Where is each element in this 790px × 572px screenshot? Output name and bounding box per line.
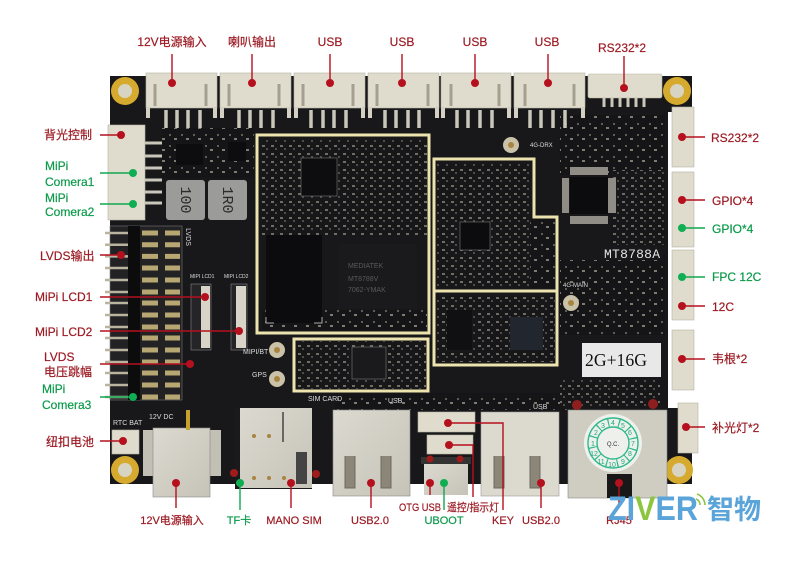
left labels: LVDS (44, 350, 74, 364)
LVDS pin header (105, 226, 191, 400)
top connectors (146, 73, 585, 128)
left labels: 纽扣电池 (46, 435, 94, 449)
left labels: MiPi LCD1 (35, 290, 93, 304)
RF antenna connectors: 4G-DRX (530, 143, 553, 149)
bottom labels: OTG USB (399, 502, 441, 514)
top labels (137, 34, 646, 55)
DC jack (143, 410, 221, 497)
RJ45 jack: 10 (608, 462, 616, 469)
bottom labels (140, 500, 632, 527)
bottom labels: USB2.0 (522, 515, 560, 527)
inductors: 1R0 (218, 186, 235, 214)
RJ45 jack: 6 (628, 430, 632, 437)
board silk: RTC BAT, 12V DC, SIM CARD: USB (388, 398, 403, 405)
bottom labels: UBOOT (424, 515, 464, 527)
RJ45 jack: 12 (590, 451, 598, 458)
connector: RS232 top (588, 74, 662, 107)
right labels: 韦根*2 (712, 352, 748, 366)
RTC battery connector (112, 430, 139, 454)
mounting hole: top right (663, 77, 691, 105)
RJ45 jack (568, 399, 667, 498)
left labels: LVDS输出 (40, 248, 94, 263)
board silk: RTC BAT, 12V DC, SIM CARD: GPS (252, 372, 267, 379)
board silk: RTC BAT, 12V DC, SIM CARD: SIM CARD (308, 396, 342, 403)
RJ45 jack: 8 (628, 451, 632, 458)
left labels: 背光控制 (44, 128, 92, 142)
chip: CPU companion memory (266, 235, 322, 323)
RJ45 jack: Q.C. (607, 442, 619, 448)
board silk: RTC BAT, 12V DC, SIM CARD: RTC BAT (113, 420, 143, 427)
RF antenna connectors (269, 137, 588, 387)
module shield frames (257, 135, 557, 391)
right labels: FPC 12C (712, 270, 762, 284)
inductors: 100 (176, 186, 193, 214)
board silk: RTC BAT, 12V DC, SIM CARD: 12V DC (149, 414, 174, 421)
chip: MediaTek processor: MEDIATEK (348, 263, 384, 270)
left labels: MiPi LCD2 (35, 325, 93, 339)
bottom labels: 12V电源输入 (140, 513, 204, 527)
RJ45 jack: 9 (621, 459, 625, 466)
left labels: MiPi (45, 191, 68, 205)
bottom labels: KEY (492, 515, 515, 527)
RJ45 jack: 11 (597, 459, 605, 466)
bottom labels: MANO SIM (266, 515, 322, 527)
left labels: MiPi (45, 159, 68, 173)
board silk: RTC BAT, 12V DC, SIM CARD: MIPI/BT (243, 349, 269, 356)
top labels: RS232*2 (598, 41, 646, 55)
top labels: 12V电源输入 (137, 34, 207, 49)
left labels (35, 128, 95, 449)
circuit board (105, 73, 698, 498)
left labels: 电压跳幅 (44, 364, 92, 379)
chip: audio / controller (460, 167, 616, 250)
left labels: Comera2 (45, 205, 95, 219)
top labels: USB (463, 35, 487, 49)
RJ45 jack: 1 (591, 441, 595, 448)
memory label (582, 343, 661, 377)
mounting hole: top left (111, 77, 139, 105)
left white connector (108, 125, 162, 220)
board model marking: MT8788A (604, 247, 660, 262)
mounting hole: bottom left (111, 456, 139, 484)
top labels: USB (535, 35, 559, 49)
SIM and TF socket (230, 408, 320, 489)
top labels: USB (318, 35, 342, 49)
logo: ZIVER 智物 (608, 490, 761, 528)
RJ45 jack: 3 (601, 423, 605, 430)
USB2.0 port left (333, 410, 410, 496)
right labels: GPIO*4 (712, 222, 754, 236)
right labels: 补光灯*2 (712, 421, 760, 435)
leader lines and dots (100, 54, 705, 510)
bottom labels: TF卡 (227, 514, 251, 527)
RJ45 jack: 7 (631, 441, 635, 448)
top labels: USB (390, 35, 414, 49)
right labels: 12C (712, 300, 734, 314)
small connectors and micro USB (418, 412, 475, 495)
LVDS pin header: LVDS (184, 228, 191, 246)
RJ45 jack: 5 (621, 423, 625, 430)
right labels (711, 131, 762, 435)
MIPI LCD FPC connectors (190, 274, 249, 350)
right labels: GPIO*4 (712, 194, 754, 208)
board silk: RTC BAT, 12V DC, SIM CARD: USB (533, 404, 548, 411)
MIPI LCD FPC connectors: MIPI LCD2 (224, 274, 249, 280)
right connectors (672, 107, 698, 453)
logo: ZIVER 智物: ZIVER (608, 490, 698, 528)
chip: power management (176, 142, 337, 196)
RF antenna connectors: 4G-MAIN (563, 283, 588, 289)
logo: ZIVER 智物: 智物 (707, 495, 761, 525)
left labels: MiPi (42, 382, 65, 396)
RJ45 jack: 2 (594, 430, 598, 437)
chip: MediaTek processor: 7062-YMAK (348, 287, 386, 294)
bottom labels: USB2.0 (351, 515, 389, 527)
USB2.0 port right (481, 412, 559, 496)
chip: MediaTek processor: MT8788V (348, 276, 379, 283)
left labels: Comera1 (45, 175, 95, 189)
component areas (162, 115, 665, 410)
right labels: RS232*2 (711, 131, 759, 145)
MIPI LCD FPC connectors: MIPI LCD1 (190, 274, 215, 280)
memory label: 2G+16G (585, 350, 647, 370)
chip: MediaTek processor (339, 244, 417, 309)
top labels: 喇叭输出 (228, 34, 276, 49)
left labels: Comera3 (42, 398, 92, 412)
RJ45 jack: 4 (611, 420, 615, 427)
inductors (166, 180, 247, 220)
mounting hole: bottom right (665, 456, 693, 484)
bottom labels: RJ45 (606, 515, 632, 527)
board silk: RTC BAT, 12V DC, SIM CARD (113, 349, 548, 427)
chip: 4G modem (352, 310, 543, 379)
bottom labels: 遥控/指示灯 (447, 500, 499, 514)
